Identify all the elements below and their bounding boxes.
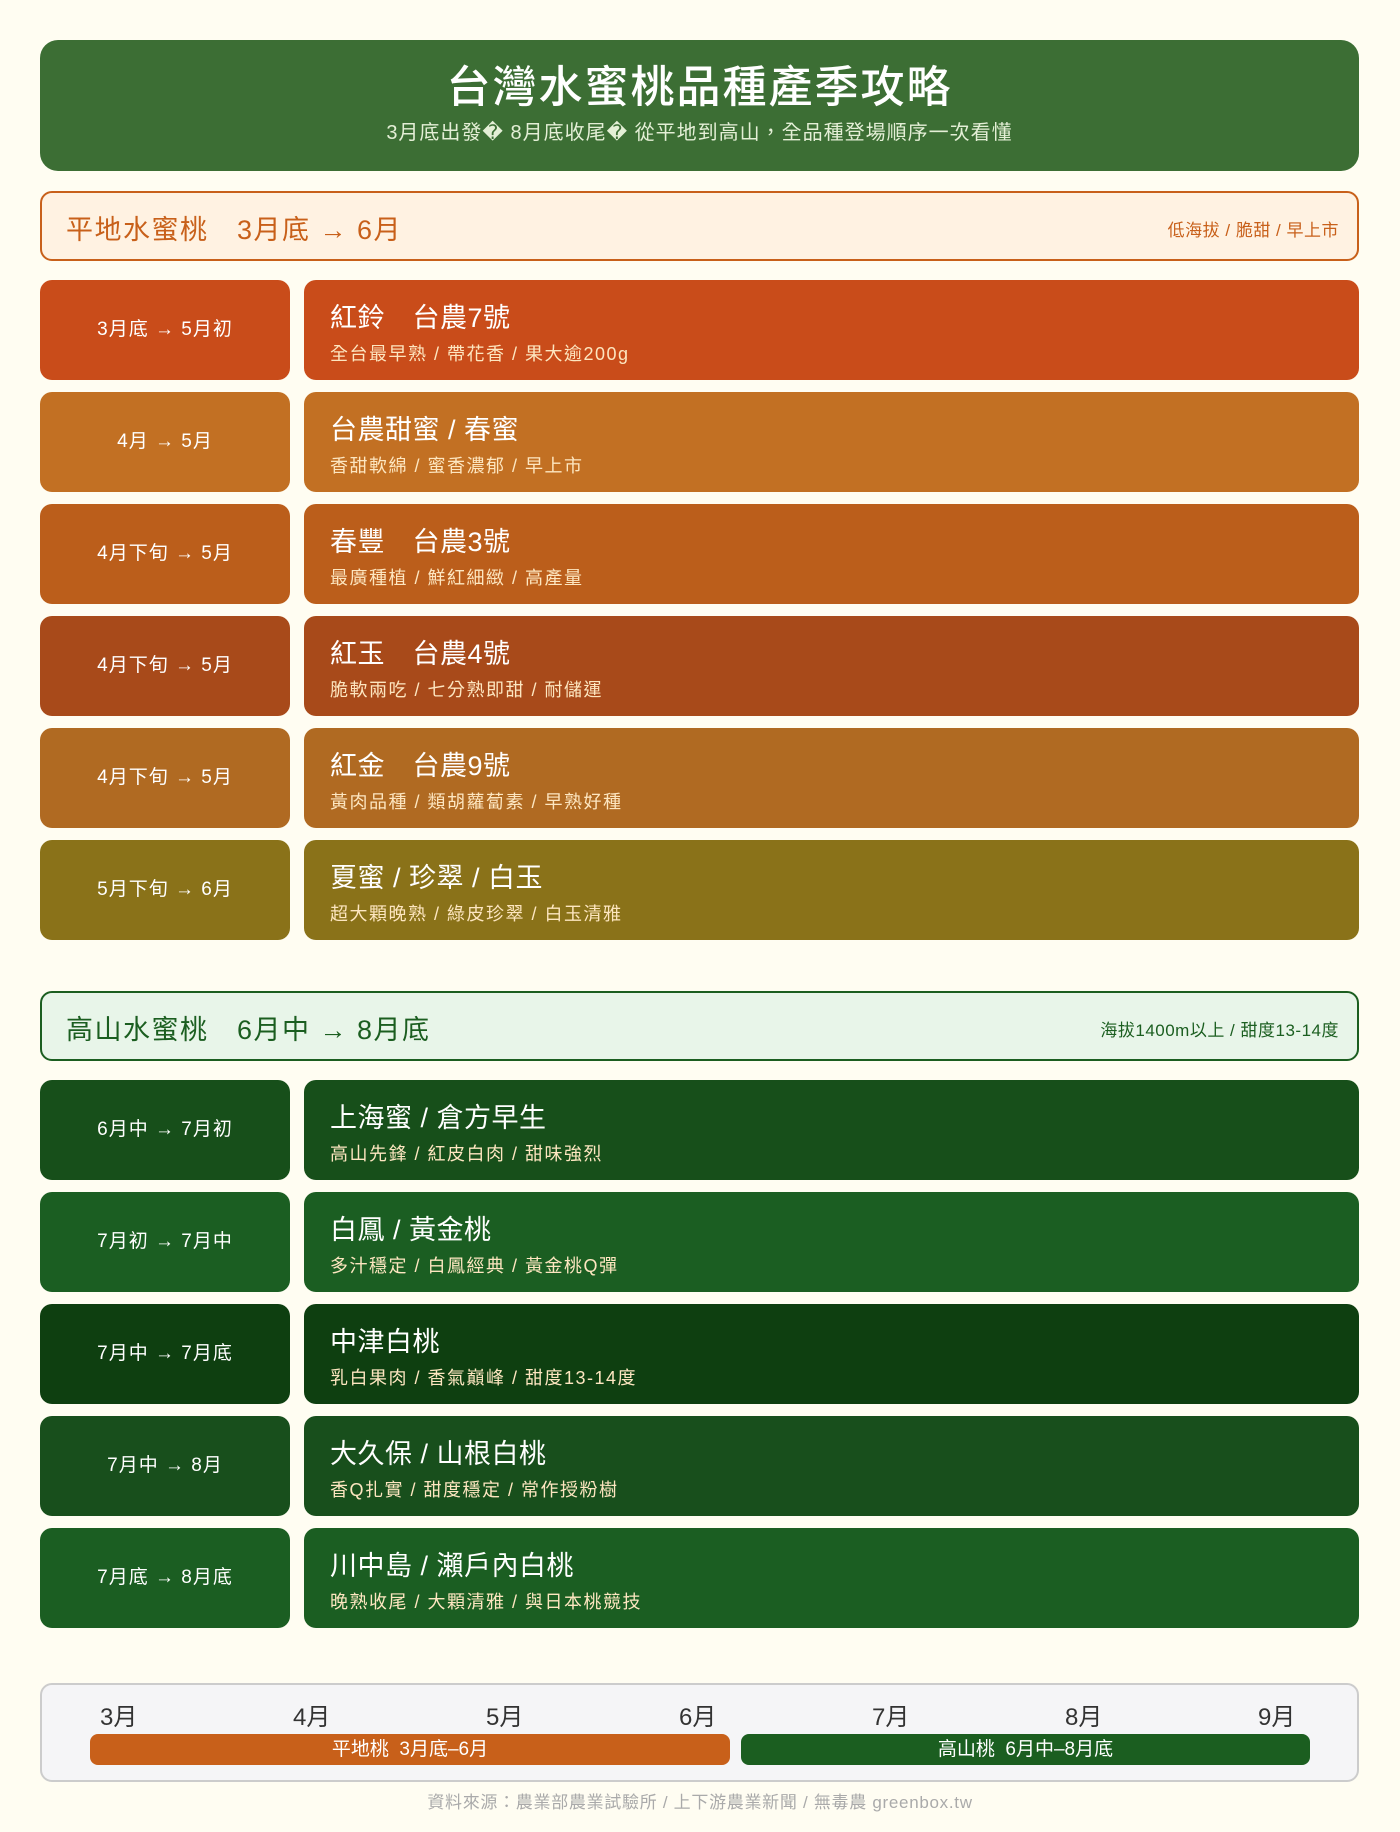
row: 川中島: [40, 1528, 1359, 1628]
row: 春豐: 春豐 台農3號: [330, 527, 511, 557]
row: 紅玉: 紅玉 台農4號: [330, 639, 511, 669]
section header: lowland: [40, 191, 1359, 261]
row: 甜蜜: 香甜軟綿 / 蜜香濃郁 / 早上市: [330, 456, 584, 476]
row: 夏蜜: [40, 840, 1359, 940]
month labels: 4月: [293, 1704, 330, 1731]
row: 紅金: 黃肉品種 / 類胡蘿蔔素 / 早熟好種: [330, 792, 623, 812]
section header: highland: [40, 991, 1359, 1061]
title: 台灣水蜜桃品種產季攻略: [446, 63, 952, 112]
row: 甜蜜: 台農甜蜜 / 春蜜: [330, 415, 519, 445]
row: 大久保: 大久保 / 山根白桃: [330, 1439, 547, 1469]
footer source: 資料來源：農業部農業試驗所 / 上下游農業新聞 / 無毒農 greenbox.tw: [427, 1793, 973, 1812]
row: 紅金: [40, 728, 1359, 828]
row: 紅玉: 脆軟兩吃 / 七分熟即甜 / 耐儲運: [330, 680, 603, 700]
month labels: [100, 1704, 1295, 1731]
bar: lowland: 平地桃 3月底–6月: [332, 1739, 488, 1760]
month labels: 7月: [872, 1704, 909, 1731]
row: 川中島: 晚熟收尾 / 大顆清雅 / 與日本桃競技: [330, 1592, 642, 1612]
row: 大久保: 7月中 → 8月: [107, 1455, 223, 1476]
row: 夏蜜: 5月下旬 → 6月: [97, 879, 233, 900]
row: 春豐: 4月下旬 → 5月: [97, 543, 233, 564]
month labels: 9月: [1258, 1704, 1295, 1731]
row: 上海蜜: 上海蜜 / 倉方早生: [330, 1103, 547, 1133]
row: 上海蜜: 6月中 → 7月初: [97, 1119, 233, 1140]
row: 紅金: 紅金 台農9號: [330, 751, 511, 781]
month labels: 5月: [486, 1704, 523, 1731]
month labels: 6月: [679, 1704, 716, 1731]
section header: highland: 海拔1400m以上 / 甜度13-14度: [1100, 1021, 1339, 1040]
row: 夏蜜: 超大顆晚熟 / 綠皮珍翠 / 白玉清雅: [330, 904, 623, 924]
row: 上海蜜: 高山先鋒 / 紅皮白肉 / 甜味強烈: [330, 1144, 603, 1164]
month labels: 3月: [100, 1704, 137, 1731]
row: 白鳳: 白鳳 / 黃金桃: [330, 1215, 492, 1245]
bar: highland: 高山桃 6月中–8月底: [938, 1739, 1113, 1760]
bar: highland: [741, 1734, 1310, 1765]
row: 紅鈴: 全台最早熟 / 帶花香 / 果大逾200g: [330, 344, 630, 364]
row: 甜蜜: [40, 392, 1359, 492]
row: 上海蜜: [40, 1080, 1359, 1180]
row: 白鳳: 多汁穩定 / 白鳳經典 / 黃金桃Q彈: [330, 1256, 619, 1276]
row: 紅鈴: 紅鈴 台農7號: [330, 303, 511, 333]
row: 大久保: 香Q扎實 / 甜度穩定 / 常作授粉樹: [330, 1480, 619, 1500]
row: 中津白桃: 7月中 → 7月底: [97, 1343, 233, 1364]
section header: highland: 高山水蜜桃 6月中 → 8月底: [66, 1015, 431, 1045]
section header: lowland: 低海拔 / 脆甜 / 早上市: [1168, 221, 1339, 240]
row: 中津白桃: 中津白桃: [330, 1327, 440, 1357]
row: 川中島: 川中島 / 瀨戶內白桃: [330, 1551, 574, 1581]
row: 紅金: 4月下旬 → 5月: [97, 767, 233, 788]
section header: lowland: 平地水蜜桃 3月底 → 6月: [66, 215, 402, 245]
row: 春豐: 最廣種植 / 鮮紅細緻 / 高產量: [330, 568, 584, 588]
row: 紅鈴: [40, 280, 1359, 380]
row: 甜蜜: 4月 → 5月: [117, 431, 213, 452]
row: 川中島: 7月底 → 8月底: [97, 1567, 233, 1588]
row: 白鳳: 7月初 → 7月中: [97, 1231, 233, 1252]
month labels: 8月: [1065, 1704, 1102, 1731]
row: 紅玉: [40, 616, 1359, 716]
row: 春豐: [40, 504, 1359, 604]
row: 夏蜜: 夏蜜 / 珍翠 / 白玉: [330, 863, 543, 893]
row: 中津白桃: 乳白果肉 / 香氣巔峰 / 甜度13-14度: [330, 1368, 637, 1388]
row: 紅玉: 4月下旬 → 5月: [97, 655, 233, 676]
header: [40, 40, 1359, 171]
row: 大久保: [40, 1416, 1359, 1516]
row: 白鳳: [40, 1192, 1359, 1292]
subtitle: 3月底出發� 8月底收尾� 從平地到高山，全品種登場順序一次看懂: [386, 122, 1013, 144]
bar: lowland: [90, 1734, 730, 1765]
row: 中津白桃: [40, 1304, 1359, 1404]
timeline panel: [40, 1683, 1359, 1782]
row: 紅鈴: 3月底 → 5月初: [97, 319, 233, 340]
